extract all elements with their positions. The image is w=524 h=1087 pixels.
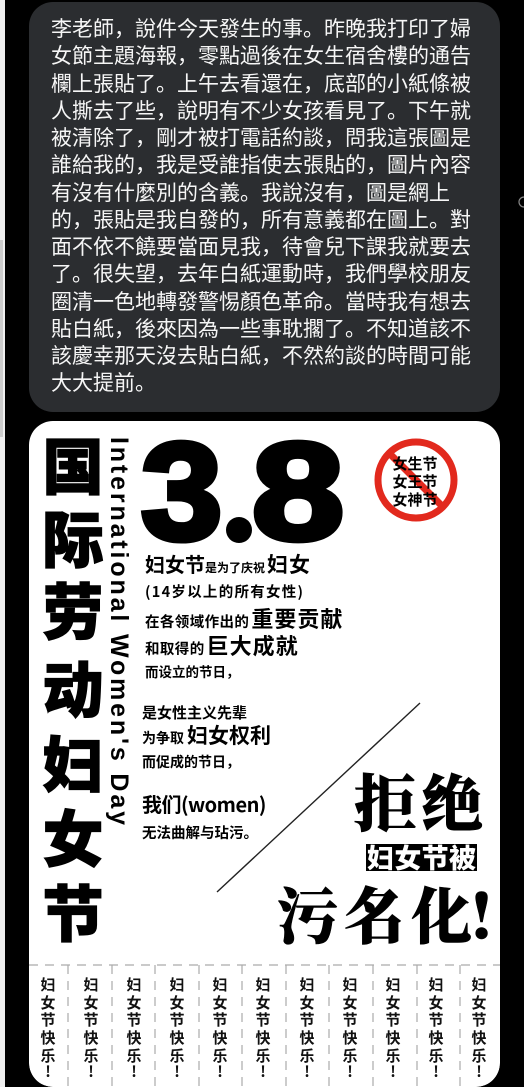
tear-off strips text: 节: [40, 1009, 56, 1030]
message text: [51, 13, 471, 397]
message text: 該慶幸那天沒去貼白紙，不然約談的時間可能: [51, 340, 471, 370]
message text: 圈清一色地轉發警惕顏色革命。當時我有想去: [51, 286, 471, 316]
diagonal divider: [217, 703, 420, 892]
tear-off strips text: 快: [385, 1027, 401, 1048]
tear-off strips text: 乐: [40, 1045, 56, 1066]
tear-off strips text: 乐: [83, 1045, 99, 1066]
tear-off strips text: 女: [299, 992, 315, 1013]
description text block: [142, 549, 343, 843]
tear-off strips text: 快: [342, 1027, 358, 1048]
tear-off strips text: 女: [212, 992, 228, 1013]
label text: 妇女节被: [367, 837, 476, 876]
tear-off strips text: 女: [83, 992, 99, 1013]
tear-off strips text: 乐: [212, 1045, 228, 1066]
tear-off strips text: 女: [385, 992, 401, 1013]
tear-off strips text: 妇: [169, 974, 185, 995]
tear-off strips text: 节: [255, 1009, 271, 1030]
tear-off strips text: 节: [342, 1009, 358, 1030]
tear-off strips text: 妇: [255, 974, 271, 995]
badge text: 女神节: [392, 489, 438, 510]
description text block: 我们(women): [142, 789, 266, 818]
tear-off strips text: 女: [342, 992, 358, 1013]
message text: 了。很失望，去年白紙運動時，我們學校朋友: [51, 258, 471, 288]
scrollbar thumb: [0, 240, 3, 437]
tear-off strips text: 女: [126, 992, 142, 1013]
description text block: (14岁以上的所有女性): [145, 581, 303, 602]
tear-off strips text: 节: [385, 1009, 401, 1030]
tear-off strips text: 节: [126, 1009, 142, 1030]
message text: 欄上張貼了。上午去看還在，底部的小紙條被: [51, 68, 471, 98]
tear-off strips text: !: [433, 1061, 439, 1082]
description text block: 是女性主义先辈: [142, 702, 247, 723]
tear-off strips text: !: [260, 1061, 266, 1082]
tear-off strips text: 乐: [169, 1045, 185, 1066]
tear-off strips text: 快: [169, 1027, 185, 1048]
tear-off strips text: 快: [40, 1027, 56, 1048]
tear-off strips text: 节: [428, 1009, 444, 1030]
tear-off strips text: !: [88, 1061, 94, 1082]
tear-off strips text: 妇: [385, 974, 401, 995]
tear-off strips dashes: [29, 965, 500, 1087]
tear-off strips text: 妇: [212, 974, 228, 995]
vertical Chinese title: 国: [42, 418, 104, 507]
vertical Chinese title: 妇: [42, 716, 104, 805]
tear-off strips text: !: [304, 1061, 310, 1082]
badge slash: [390, 454, 442, 506]
tear-off strips text: 快: [299, 1027, 315, 1048]
tear-off strips text: 妇: [83, 974, 99, 995]
vertical Chinese title: 女: [42, 790, 104, 879]
tear-off strips text: 快: [83, 1027, 99, 1048]
slogan: 污名化: 污名化!: [277, 869, 499, 956]
message text: 貼白紙，後來因為一些事耽擱了。不知道該不: [51, 313, 471, 343]
tear-off strips text: 乐: [471, 1045, 487, 1066]
label box: [366, 844, 477, 871]
message text: 有沒有什麼別的含義。我說沒有，圖是網上: [51, 176, 450, 206]
badge ring: [378, 442, 454, 518]
tear-off strips text: 快: [428, 1027, 444, 1048]
tear-off strips text: 女: [169, 992, 185, 1013]
tear-off strips text: 快: [212, 1027, 228, 1048]
message text: 大大提前。: [51, 367, 156, 397]
tear-off strips text: !: [174, 1061, 180, 1082]
tear-off strips text: 快: [471, 1027, 487, 1048]
message text: 面不依不饒要當面見我，待會兒下課我就要去: [51, 231, 471, 261]
description text block: 在各领域作出的重要贡献: [145, 602, 343, 634]
tear-off strips text: !: [476, 1061, 482, 1082]
tear-off strips text: 女: [471, 992, 487, 1013]
tear-off strips text: !: [347, 1061, 353, 1082]
tear-off strips text: 乐: [126, 1045, 142, 1066]
prohibition badge: [378, 442, 454, 518]
bottom corner mask: [29, 1063, 500, 1087]
vertical Chinese title: 动: [42, 641, 104, 730]
vertical Chinese title: [42, 418, 104, 954]
tear-off strips text: 乐: [428, 1045, 444, 1066]
description text block: 和取得的巨大成就: [145, 629, 299, 661]
badge text: 女王节: [392, 471, 438, 492]
tear-off strips text: 节: [83, 1009, 99, 1030]
tear-off strips text: 乐: [385, 1045, 401, 1066]
message bubble: [29, 2, 500, 412]
tear-off strips text: 妇: [126, 974, 142, 995]
tear-off strips text: 妇: [428, 974, 444, 995]
slogan: 拒绝: 拒绝: [354, 755, 488, 844]
icon: partial circle at right edge: [519, 197, 524, 207]
badge text: 女生节: [392, 453, 438, 474]
vertical Chinese title: 劳: [42, 563, 104, 652]
description text block: 妇女节是为了庆祝妇女: [145, 549, 311, 579]
tear-off strips text: 乐: [342, 1045, 358, 1066]
tear-off strips text: !: [131, 1061, 137, 1082]
message text: 誰給我的，我是受誰指使去張貼的，圖片內容: [51, 149, 471, 179]
big date 3.8: 3: [141, 415, 222, 569]
tear-off strips text: !: [45, 1061, 51, 1082]
left browser edge strip: [0, 0, 5, 1087]
tear-off strips text: 妇: [471, 974, 487, 995]
tear-off strips text: 快: [126, 1027, 142, 1048]
vertical Chinese title: 节: [42, 865, 104, 954]
tear-off strips text: 乐: [255, 1045, 271, 1066]
tear-off strips text: 妇: [342, 974, 358, 995]
message text: 的，張貼是我自發的，所有意義都在圖上。對: [51, 204, 471, 234]
message text: 人撕去了些，說明有不少女孩看見了。下午就: [51, 95, 471, 125]
description text block: 而设立的节日，: [145, 661, 240, 681]
tear-off strips text: 节: [212, 1009, 228, 1030]
vertical English title: International Women's Day: [105, 437, 133, 825]
tear-off strips text: 女: [428, 992, 444, 1013]
message text: 李老師，說件今天發生的事。昨晚我打印了婦: [51, 13, 471, 43]
tear-off strips text: 女: [255, 992, 271, 1013]
badge text: [392, 453, 438, 510]
decimal point: .: [232, 516, 239, 543]
tear-off strips text: 女: [40, 992, 56, 1013]
decimal point: [226, 516, 252, 543]
tear-off strips text: 快: [255, 1027, 271, 1048]
poster background: [29, 421, 500, 1087]
description text block: 无法曲解与玷污。: [142, 822, 258, 843]
message text: 女節主題海報，零點過後在女生宿舍樓的通告: [51, 40, 471, 70]
black label: [366, 837, 477, 876]
tear-off strips text: !: [390, 1061, 396, 1082]
big date 3.8: 8: [252, 415, 344, 569]
description text block: 为争取妇女权利: [142, 720, 271, 750]
tear-off strips text: 节: [471, 1009, 487, 1030]
tear-off strips text: !: [217, 1061, 223, 1082]
big date 3.8: [141, 415, 344, 569]
tear-off strips text: 节: [299, 1009, 315, 1030]
tear-off strips text: 节: [169, 1009, 185, 1030]
description text block: 而促成的节日，: [142, 752, 240, 772]
tear-off strips text: 乐: [299, 1045, 315, 1066]
tear-off strips text: 妇: [40, 974, 56, 995]
vertical Chinese title: 际: [42, 491, 104, 580]
tear-off strips text: 妇: [299, 974, 315, 995]
tear-off strips text: [40, 974, 487, 1082]
message text: 被清除了，剛才被打電話約談，問我這張圖是: [51, 122, 471, 152]
